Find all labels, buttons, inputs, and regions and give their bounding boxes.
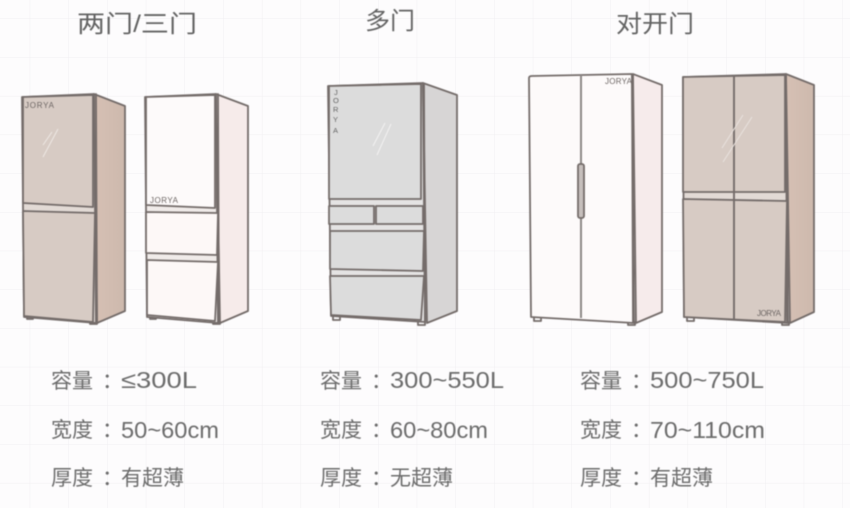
spec list: 多门: 300~550L <box>390 367 504 393</box>
spec list: 两门/三门: 有超薄 <box>121 467 184 490</box>
brand mark: JORYA <box>605 77 633 86</box>
spec list: 两门/三门: ： <box>102 370 123 393</box>
upper door <box>23 95 93 207</box>
spec list: 多门: ： <box>371 467 392 490</box>
spec list: 两门/三门: 厚度 <box>51 467 93 490</box>
brand mark: JORYA <box>757 309 782 318</box>
fridge: side-by-side white <box>529 74 662 325</box>
top door <box>146 95 215 208</box>
glass reflection <box>43 129 58 157</box>
spec list: 两门/三门: 50~60cm <box>121 417 219 443</box>
vertical brand mark: J <box>334 88 338 97</box>
spec list: 对开门: ： <box>631 370 652 393</box>
spec list: 多门: 宽度 <box>320 419 362 442</box>
middle drawer <box>330 231 424 271</box>
spec list: 对开门: 容量 <box>580 370 622 393</box>
fridge: multi-door grey <box>328 83 457 325</box>
vertical brand mark: O <box>333 96 339 105</box>
spec list: 两门/三门: ： <box>102 467 123 490</box>
spec list: 两门/三门: ： <box>102 419 123 442</box>
lower door <box>23 211 95 322</box>
vertical brand mark: Y <box>333 115 338 124</box>
spec list: 对开门: 70~110cm <box>650 417 765 443</box>
spec list: 对开门: ： <box>631 467 652 490</box>
top door <box>329 84 421 199</box>
vertical brand mark <box>333 88 339 135</box>
upper doors <box>683 75 785 192</box>
small drawer right <box>376 206 423 224</box>
spec list: 两门/三门: 宽度 <box>51 419 93 442</box>
heading: 多门: 多门 <box>365 8 415 35</box>
bottom drawer <box>147 260 218 321</box>
spec list: 多门: 厚度 <box>320 467 362 490</box>
vertical brand mark: R <box>333 105 339 114</box>
spec list: 对开门: 500~750L <box>650 367 764 393</box>
heading: 两门/三门: 两门/三门 <box>77 11 197 38</box>
spec list: 对开门: 厚度 <box>580 467 622 490</box>
spec list: 多门: ： <box>371 370 392 393</box>
small drawer left <box>329 206 374 224</box>
spec list: 两门/三门: 容量 <box>51 370 93 393</box>
middle drawer <box>146 212 218 255</box>
spec list: 多门 <box>320 367 504 490</box>
heading: 对开门: 对开门 <box>616 11 694 38</box>
spec list: 对开门: 宽度 <box>580 419 622 442</box>
brand mark: JORYA <box>150 196 179 205</box>
fridge: three-door white <box>145 94 248 324</box>
spec list: 多门: ： <box>371 419 392 442</box>
spec list: 两门/三门 <box>51 367 219 490</box>
centre door line <box>733 75 735 319</box>
centre door line <box>580 75 582 318</box>
handle <box>578 164 584 218</box>
fridge: four-door beige <box>683 74 814 325</box>
spec list: 对开门 <box>580 367 765 490</box>
bottom drawer <box>330 276 424 320</box>
spec list: 多门: 60~80cm <box>390 417 488 443</box>
spec list: 多门: 容量 <box>320 370 362 393</box>
lower doors <box>683 199 787 322</box>
brand mark: JORYA <box>25 101 55 110</box>
glass reflection <box>373 123 391 155</box>
vertical brand mark: A <box>333 126 338 135</box>
spec list: 多门: 无超薄 <box>390 467 453 490</box>
spec list: 对开门: 有超薄 <box>650 467 713 490</box>
spec list: 两门/三门: ≤300L <box>121 367 197 393</box>
spec list: 对开门: ： <box>631 419 652 442</box>
glass reflection <box>722 115 752 162</box>
fridge: two-door beige <box>22 94 125 324</box>
